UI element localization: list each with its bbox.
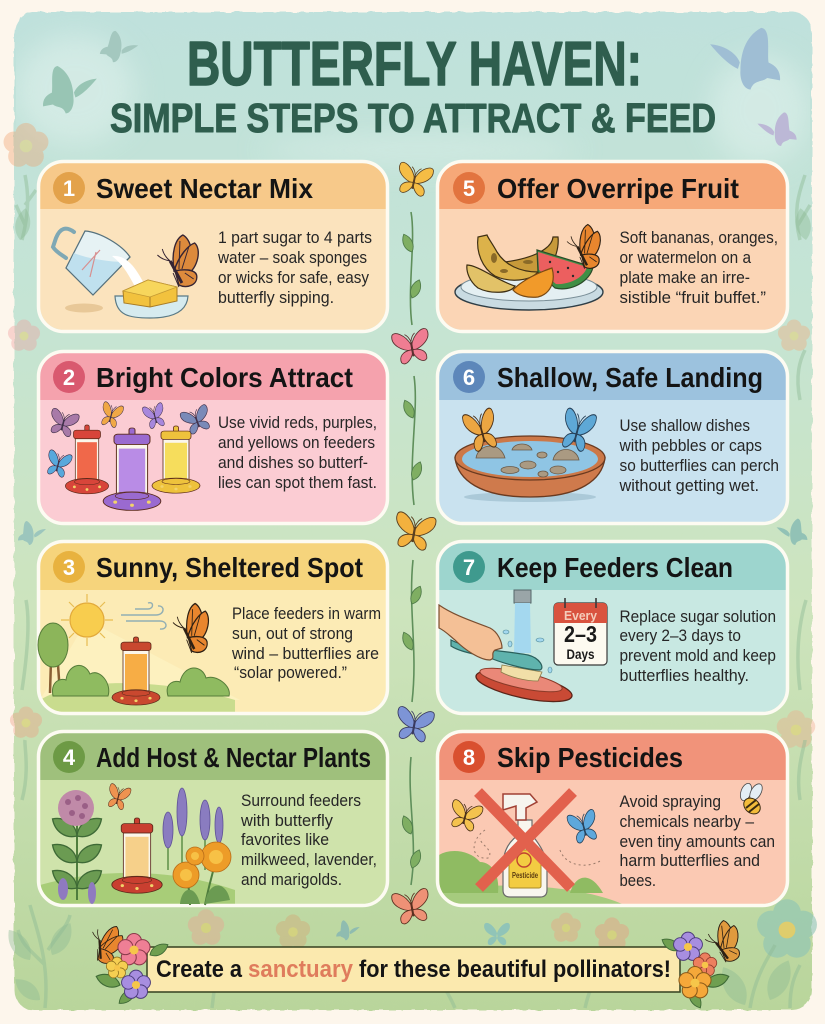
body text: and dishes so butterf-: [218, 454, 368, 472]
body text: Use vivid reds, purples,: [218, 414, 377, 432]
card 5: offer overripe fruit: [438, 162, 788, 332]
banner text: sanctuary: [248, 956, 354, 983]
number badge 8: 8: [463, 745, 475, 770]
body text: or watermelon on a: [620, 249, 752, 267]
faint butterfly top left small: [99, 29, 140, 66]
icon: wind lines: [121, 603, 166, 629]
body text: Soft bananas, oranges,: [620, 229, 778, 247]
body text: bees.: [620, 872, 656, 890]
body text: [240, 792, 377, 889]
number badge 5: 5: [463, 176, 475, 201]
icon: monarch butterfly: [157, 235, 198, 287]
number badge 3: 3: [63, 555, 75, 580]
faint butterfly left: [40, 63, 100, 115]
body text: favorites like: [241, 831, 329, 849]
body text: [620, 229, 778, 307]
body text: Use shallow dishes: [620, 417, 750, 435]
number badge 8: [453, 741, 485, 773]
body text: Surround feeders: [241, 792, 361, 810]
body text: plate make an irre-: [620, 269, 750, 287]
body text: prevent mold and keep: [620, 647, 776, 665]
body text: butterfly sipping.: [218, 289, 334, 307]
title line 1: BUTTERFLY HAVEN:: [187, 30, 642, 99]
faint side and bottom plants: [16, 175, 810, 1008]
icon: hand with brush: [439, 605, 542, 681]
center vine with butterflies: [391, 162, 437, 925]
body text: Place feeders in warm: [232, 605, 381, 623]
icon: feeder: [112, 637, 160, 705]
illustration ground and bush: [439, 851, 622, 904]
title: [110, 30, 716, 141]
icon: measuring cup pouring into sponge bowl: [53, 229, 188, 318]
number badge 2: [53, 361, 85, 393]
body text: with butterfly: [240, 812, 334, 830]
icon: left bush: [53, 665, 109, 696]
body text: and yellows on feeders: [218, 434, 375, 452]
heading: Offer Overripe Fruit: [497, 173, 739, 204]
number badge 2: 2: [63, 365, 75, 390]
banner text: Create a: [156, 956, 243, 983]
icon: lavender: [163, 788, 223, 870]
body text: [620, 608, 776, 685]
right flower cluster: [660, 919, 742, 1010]
icon: butterfly: [105, 783, 132, 811]
icon: spray bottle: Pesticide: [512, 871, 538, 880]
card 1: sweet nectar mix: [38, 162, 388, 332]
body text: [217, 229, 372, 307]
body text: 1 part sugar to 4 parts: [218, 229, 372, 247]
body text: Avoid spraying: [620, 793, 721, 811]
background clouds: [15, 35, 810, 165]
icon: yellow butterfly: [447, 799, 484, 833]
heading: Bright Colors Attract: [96, 362, 353, 393]
body text: even tiny amounts can: [620, 833, 775, 851]
body text: [231, 605, 381, 682]
body text: without getting wet.: [619, 477, 759, 495]
card 8: skip pesticides: [438, 732, 788, 906]
icon: red dish: [474, 663, 574, 708]
icon: faucet and water: [503, 590, 552, 673]
icon: butterfly: [703, 919, 742, 965]
body text: every 2–3 days to: [620, 627, 741, 645]
banner text: [156, 956, 671, 983]
butterfly pink: [391, 328, 432, 365]
heading: Add Host & Nectar Plants: [96, 742, 371, 773]
card 4: add host and nectar plants: [38, 732, 388, 906]
number badge 3: [53, 551, 85, 583]
body text: and marigolds.: [241, 871, 342, 889]
closing banner: [82, 918, 742, 1010]
icon: marigolds: [173, 842, 231, 905]
body text: so butterflies can perch: [620, 457, 779, 475]
faint butterfly lilac: [757, 112, 797, 146]
left flower cluster: [82, 918, 170, 1007]
icon: red feeder: [65, 425, 109, 494]
icon: calendar every 2-3 days: Days: [566, 646, 595, 662]
illustration ground and light: [42, 628, 239, 712]
card 6: shallow safe landing: [438, 352, 788, 524]
icon: milkweed: [52, 790, 102, 904]
body text: [218, 414, 377, 492]
butterfly orange: [392, 511, 437, 552]
icon: calendar every 2-3 days: [554, 598, 607, 665]
number badge 4: 4: [63, 745, 76, 770]
icon: sun with rays: [61, 594, 113, 646]
icon: spray bottle: [503, 794, 547, 897]
faint butterfly top right: [706, 24, 784, 92]
faint butterflies at margins: [18, 521, 46, 545]
number badge 1: 1: [63, 176, 75, 201]
icon: bee: [738, 782, 765, 817]
body text: or wicks for safe, easy: [218, 269, 370, 287]
body text: sun, out of strong: [232, 625, 353, 643]
number badge 1: [53, 172, 85, 204]
number badge 6: 6: [463, 365, 475, 390]
body text: Replace sugar solution: [620, 608, 776, 626]
number badge 6: [453, 361, 485, 393]
body text: chemicals nearby –: [620, 813, 755, 831]
body text: “solar powered.”: [234, 664, 347, 682]
card 2: bright colors attract: [38, 352, 388, 524]
card 3: sunny sheltered spot: [38, 542, 388, 714]
body text: water – soak sponges: [217, 249, 367, 267]
faint teal flower bottom right: [757, 899, 817, 958]
butterfly coral: [391, 888, 432, 925]
heading: Sunny, Sheltered Spot: [96, 552, 363, 583]
number badge 4: [53, 741, 85, 773]
icon: monarch butterfly: [567, 224, 600, 269]
icon: small butterflies: [44, 401, 214, 479]
body text: [620, 793, 775, 890]
body text: harm butterflies and: [620, 852, 760, 870]
icon: blue butterfly: [566, 809, 601, 845]
icon: purple feeder: [103, 428, 161, 510]
heading: Shallow, Safe Landing: [497, 362, 763, 393]
number badge 7: 7: [463, 555, 475, 580]
body text: with pebbles or caps: [619, 437, 762, 455]
icon: dotted flight paths: [474, 830, 602, 865]
banner text: for these beautiful pollinators!: [359, 956, 671, 983]
heading: Sweet Nectar Mix: [96, 173, 313, 204]
butterfly yellow: [394, 162, 434, 198]
icon: red cross: [478, 792, 573, 888]
icon: blue butterfly: [557, 408, 597, 453]
icon: calendar every 2-3 days: 2–3: [564, 621, 597, 647]
icon: calendar every 2-3 days: Every: [564, 608, 598, 623]
body text: [619, 417, 779, 495]
heading: Keep Feeders Clean: [497, 552, 733, 583]
card 7: keep feeders clean: [438, 542, 788, 714]
body text: sistible “fruit buffet.”: [620, 289, 766, 307]
illustration ground: [40, 873, 235, 904]
icon: right bush: [167, 668, 229, 696]
body text: wind – butterflies are: [231, 645, 379, 663]
body text: butterflies healthy.: [620, 667, 749, 685]
icon: dish with pebbles: [455, 436, 605, 502]
butterfly blue: [394, 706, 435, 743]
icon: yellow feeder: [152, 426, 200, 493]
icon: fruit plate: [455, 235, 603, 310]
body text: milkweed, lavender,: [241, 851, 377, 869]
icon: orange butterfly: [462, 408, 502, 453]
body text: lies can spot them fast.: [218, 474, 377, 492]
heading: Skip Pesticides: [497, 742, 683, 773]
icon: feeder: [112, 818, 162, 893]
number badge 7: [453, 551, 485, 583]
title line 2: SIMPLE STEPS TO ATTRACT & FEED: [110, 95, 716, 141]
icon: butterfly: [82, 918, 127, 967]
icon: tree: [38, 623, 68, 693]
icon: monarch butterfly: [173, 604, 208, 653]
faint flowers: [4, 123, 815, 951]
number badge 5: [453, 172, 485, 204]
